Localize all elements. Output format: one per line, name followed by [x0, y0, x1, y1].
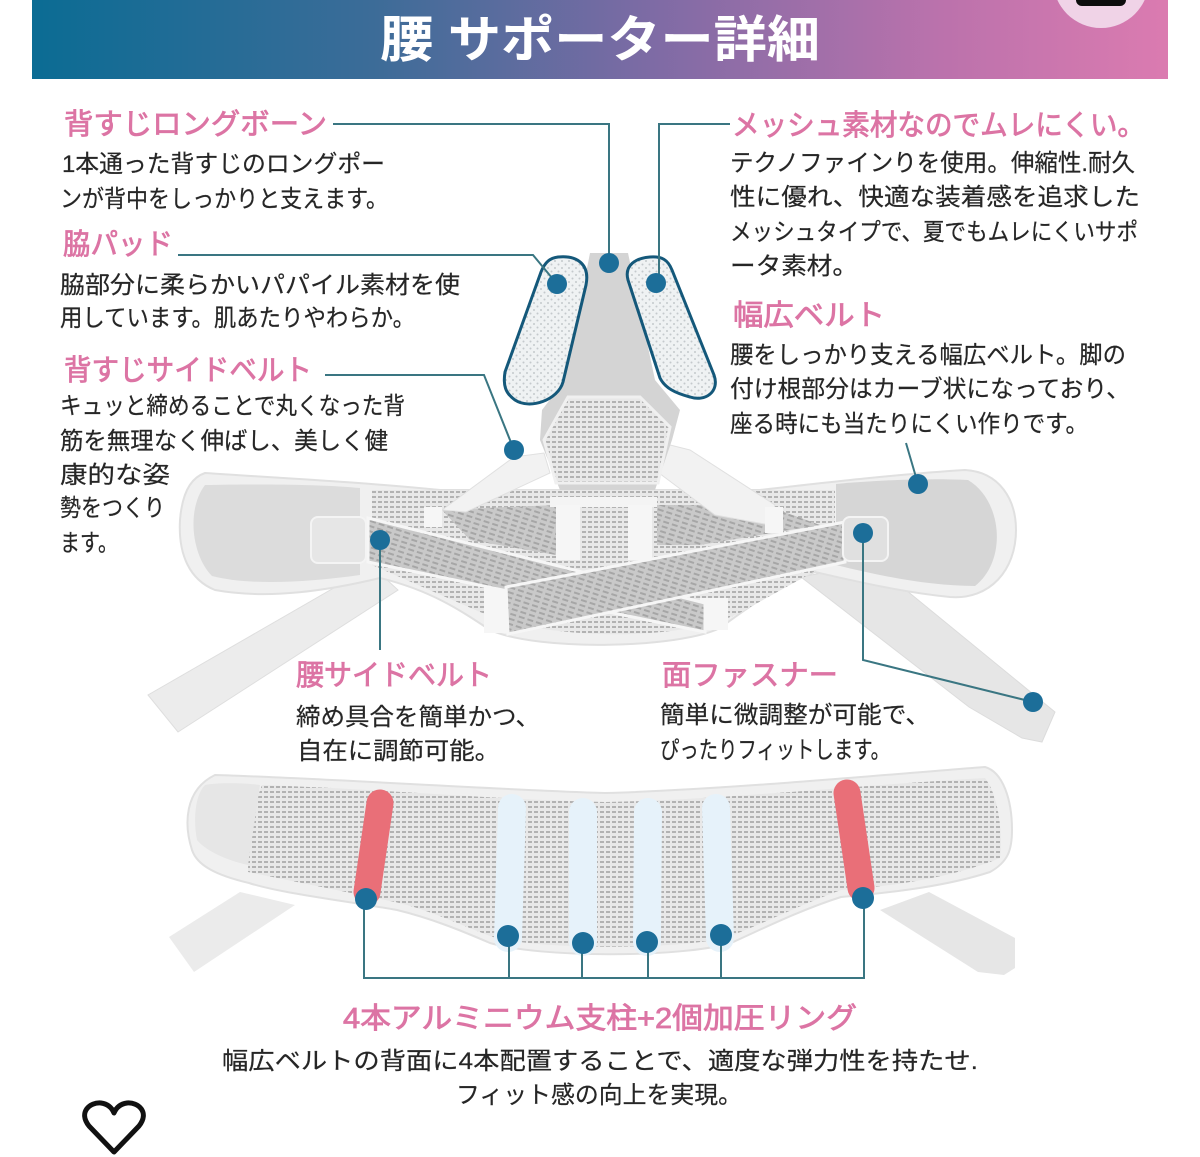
callout: hook and loop fastener — [660, 660, 930, 764]
callout: side pad: 脇パッド — [63, 229, 173, 261]
callout: hook and loop fastener: 簡単に微調整が可能で、 — [660, 702, 930, 729]
header banner — [32, 0, 1168, 79]
callout: mesh material: 性に優れ、快適な装着感を追求した — [730, 184, 1140, 211]
shoulder pad right — [627, 257, 715, 398]
icon: heart outline — [85, 1103, 143, 1152]
shoulder pad left — [504, 257, 587, 404]
back mesh hexagon — [544, 397, 670, 483]
callout: mesh material: ータ素材。 — [730, 253, 858, 280]
callout: aluminium stays and rings: フィット感の向上を実現。 — [456, 1082, 742, 1109]
aluminium stay 3 — [647, 812, 648, 942]
callout: back side belt: 康的な姿 — [60, 462, 170, 489]
callout: wide belt: 座る時にも当たりにくい作りです。 — [730, 411, 1088, 438]
callout: waist side belt: 締め具合を簡単かつ、 — [296, 704, 540, 731]
callout: side pad: 用しています。肌あたりやわらか。 — [60, 305, 415, 332]
knit panel left — [442, 505, 556, 555]
callout: back side belt: キュッと締めることで丸くなった背 — [60, 393, 405, 420]
callout: mesh material — [730, 109, 1145, 280]
knit panel right — [657, 505, 820, 545]
left strap — [169, 892, 295, 972]
callout: long bone: ンが背中をしっかりと支えます。 — [60, 186, 388, 213]
callout: long bone: 背すじロングボーン — [64, 108, 327, 141]
top tabs — [550, 497, 657, 507]
aluminium stay 1 — [508, 808, 512, 938]
callout: waist side belt — [296, 660, 540, 765]
callout: hook and loop fastener: 面ファスナー — [662, 660, 838, 692]
callout: waist side belt: 腰サイドベルト — [296, 660, 492, 692]
callout: mesh material: メッシュタイプで、夏でもムレにくいサポ — [730, 219, 1138, 246]
callout: long bone — [60, 108, 388, 213]
waist side belt left — [368, 518, 705, 632]
belt outline — [188, 767, 1012, 954]
callout: aluminium stays and rings — [222, 1002, 978, 1109]
callout: back side belt: ます。 — [60, 530, 118, 557]
red ring right — [847, 793, 861, 888]
callout: wide belt: 幅広ベルト — [733, 299, 885, 332]
callout: mesh material: テクノファインりを使用。伸縮性.耐久 — [730, 150, 1135, 177]
callout: mesh material: メッシュ素材なのでムレにくい。 — [732, 109, 1145, 142]
callout: side pad: 脇部分に柔らかいパパイル素材を使 — [60, 272, 460, 299]
vertical stays — [556, 505, 580, 560]
upper back panel — [540, 253, 680, 490]
shoulder side strap right — [655, 445, 775, 525]
lower belt illustration — [169, 767, 1015, 975]
right fastener tab — [843, 517, 888, 561]
callout: hook and loop fastener: ぴったりフィットします。 — [660, 737, 890, 764]
right wing pad — [836, 479, 997, 586]
belt mesh — [372, 490, 835, 634]
callout: back side belt: 背すじサイドベルト — [64, 354, 312, 387]
red ring left — [367, 803, 380, 892]
header title: 腰 サポーター詳細 — [380, 12, 820, 68]
shoulder side strap left — [442, 453, 550, 512]
callout: wide belt — [730, 299, 1130, 438]
callout: side pad — [60, 229, 460, 332]
callout: back side belt: 勢をつくり — [60, 495, 165, 522]
callout: back side belt: 筋を無理なく伸ばし、美しく健 — [60, 428, 388, 455]
callout: long bone: 1本通った背すじのロングポー — [62, 151, 385, 178]
callout: back side belt — [60, 354, 405, 557]
lower left strap — [148, 566, 398, 732]
aluminium stay 2 — [569, 812, 597, 942]
left wing pad — [193, 484, 360, 582]
callout dots — [355, 253, 1043, 954]
icon: badge at top right — [1053, 0, 1149, 28]
aluminium stay 4 — [716, 808, 720, 938]
left fastener tab — [311, 517, 366, 563]
upper belt illustration — [148, 253, 1055, 742]
waist side belt right — [506, 522, 845, 634]
callout: waist side belt: 自在に調節可能。 — [297, 738, 500, 765]
lower right strap — [801, 563, 1055, 742]
belt body — [180, 470, 1016, 645]
left end pad — [195, 783, 260, 865]
callout: aluminium stays and rings: 4本アルミニウム支柱+2個加圧リング — [343, 1002, 857, 1035]
callout: wide belt: 腰をしっかり支える幅広ベルト。脚の — [730, 342, 1126, 369]
leader lines — [178, 124, 1033, 978]
belt mesh area — [248, 778, 1001, 947]
callout: aluminium stays and rings: 幅広ベルトの背面に4本配置することで、適度な弾力性を持たせ. — [222, 1048, 978, 1075]
callout: wide belt: 付け根部分はカーブ状になっており、 — [730, 376, 1130, 403]
right strap — [880, 892, 1015, 975]
